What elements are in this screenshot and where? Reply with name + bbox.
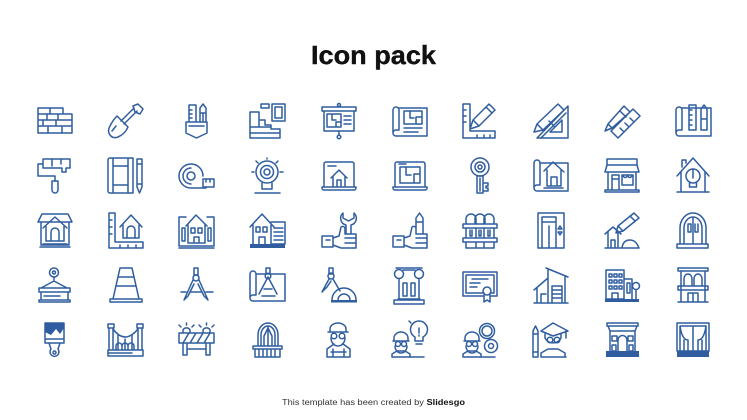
- icon: set square and pencils: [534, 104, 568, 138]
- icon: notebook and pencil: [108, 158, 142, 193]
- icon: engineer with idea: [392, 321, 427, 357]
- icon: thumbs up with wrench: [322, 213, 356, 248]
- icon: stairs: [250, 104, 285, 138]
- icon: engineer with gears: [463, 324, 498, 357]
- title: Icon pack: [311, 40, 437, 70]
- icon: engineer: [327, 323, 350, 357]
- icon: blueprint: [393, 107, 427, 136]
- icon: ruler and pencil: [463, 104, 495, 138]
- icon: laptop with house: [322, 162, 356, 190]
- icon: arched window balcony: [253, 323, 282, 357]
- icon: traffic cone: [110, 268, 142, 302]
- icon: laptop with plan: [393, 162, 427, 190]
- icon: paint brush: [45, 323, 64, 356]
- icon: classic facade: [678, 268, 708, 302]
- icon: graduate with pencil: [533, 323, 568, 357]
- icon: thumbs up with pencil: [393, 213, 427, 248]
- icon: presentation board: [322, 104, 356, 139]
- icon: house and pencil: [605, 213, 639, 248]
- icon: road barrier: [179, 323, 214, 355]
- icon: fence: [463, 214, 497, 248]
- icon: ruler and house: [109, 213, 143, 248]
- icon: crane load: [39, 268, 70, 302]
- icon: blueprint with tools: [676, 105, 711, 136]
- icon: building and tree: [605, 270, 640, 302]
- icon: house under roof: [38, 214, 72, 247]
- icon: blueprint with house: [534, 160, 568, 191]
- icon: paint roller: [38, 159, 70, 193]
- icon: arched door: [677, 213, 708, 248]
- icon: shovel: [108, 104, 143, 138]
- icon: pocket with ruler and pencil: [186, 104, 207, 138]
- icon: shop: [605, 159, 639, 192]
- icon: certificate: [463, 272, 497, 302]
- footer credit: This template has been created by Slidesgo: [282, 398, 465, 407]
- icon: blueprint with compass: [250, 268, 285, 301]
- icon: bricks: [38, 108, 72, 133]
- icon: elevator: [538, 213, 564, 248]
- icon: modern house: [534, 268, 568, 303]
- icon: drafting compass: [181, 268, 213, 300]
- icon grid: [38, 104, 711, 357]
- icon: compass and protractor: [322, 268, 357, 302]
- icon: light bulb gear: [252, 158, 283, 193]
- icon: curtained window: [677, 323, 709, 357]
- icon: tape measure: [179, 164, 214, 188]
- icon: ionic column: [394, 268, 424, 304]
- icon: pencil and ruler: [605, 106, 640, 138]
- icon: key: [471, 158, 489, 193]
- icon: house with bulb: [677, 158, 709, 192]
- icon: house with garage: [250, 214, 285, 248]
- icon: triumphal arch: [606, 323, 639, 357]
- icon: gate bridge: [108, 324, 143, 356]
- icon: house blueprint: [179, 215, 214, 248]
